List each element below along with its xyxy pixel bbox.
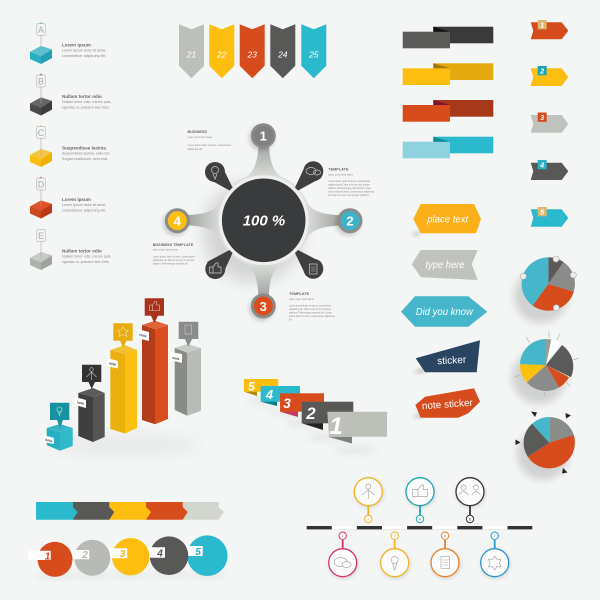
circle 5 — [176, 535, 228, 576]
bar gray: note — [172, 356, 180, 361]
cube item D: D — [38, 180, 45, 190]
text: template bottom: dapibus. Pellentesque placerat elit. Lorem — [289, 312, 332, 314]
cube item D — [30, 176, 106, 218]
circle 2: 2 — [81, 550, 88, 561]
node 3 — [249, 294, 276, 321]
node 2: 2 — [346, 214, 354, 228]
text: business: type your text here — [188, 135, 213, 139]
panel: timeline — [307, 478, 532, 578]
text: template right — [328, 168, 375, 197]
panel: 3D bar chart — [44, 298, 201, 455]
tag 1: 1 — [540, 22, 544, 30]
circle 2 — [64, 540, 110, 576]
hub connectors — [188, 145, 339, 296]
flag 23: 23 — [246, 50, 257, 60]
ribbon 1 — [327, 412, 387, 444]
circle 1: 1 — [45, 552, 51, 562]
flag 25: 25 — [308, 50, 319, 60]
pin 1 chat: 1 — [342, 533, 345, 538]
ribbon dark — [403, 27, 493, 48]
text: template right: elit. Nam at est ac orci semper. Dapibus — [328, 194, 370, 197]
ribbon 4 — [261, 386, 300, 406]
text: template bottom — [289, 292, 336, 322]
cube item B: Nullam tortor odio — [62, 94, 102, 99]
text: business template: type your text here — [153, 248, 178, 252]
text: template right: type your text here — [328, 172, 353, 176]
segment teal — [36, 502, 78, 520]
tag 2 — [531, 66, 568, 86]
flag 24 — [270, 24, 295, 78]
text: template right: TEMPLATE — [328, 168, 349, 172]
pin 4 thumb — [406, 478, 435, 523]
pin 5 document — [431, 532, 460, 578]
ribbon shadows — [246, 400, 377, 453]
flag 22 — [209, 24, 234, 78]
bar dark: note — [76, 400, 84, 406]
hub centre 100 % — [222, 178, 306, 262]
icon node: thumb — [205, 250, 232, 279]
tag 4: 4 — [539, 162, 544, 170]
bar teal — [44, 403, 73, 451]
text: business: adipiscing elit. — [188, 148, 203, 151]
circle shadows — [35, 572, 227, 578]
tag 4 — [531, 160, 568, 180]
ribbon 1: 1 — [329, 413, 343, 440]
text: business template: Lorem ipsum dolor sit amet, consectetuer — [153, 256, 195, 258]
sticker note: note sticker — [422, 398, 474, 412]
bar yellow: note — [108, 361, 116, 367]
ribbon yellow — [403, 63, 493, 85]
panel: central hub diagram — [153, 123, 375, 322]
text: template bottom: ipsum dolor sit amet, consectetuer adipiscing — [289, 315, 336, 318]
ribbon 3 — [280, 393, 324, 417]
sticker place text — [411, 204, 481, 236]
cube item B: egestas ut, posuere sed, felis. — [62, 106, 110, 110]
tag 1 — [531, 20, 568, 39]
segment orange — [146, 502, 188, 520]
tag 5: 5 — [540, 210, 544, 216]
bar teal: note — [45, 438, 53, 443]
bar orange — [137, 298, 168, 424]
panel: numbered stacked ribbons — [244, 379, 387, 453]
sticker place text: place text — [426, 214, 469, 226]
node 1: 1 — [260, 128, 267, 144]
tag 2: 2 — [539, 68, 544, 76]
panel: numbered circles — [28, 535, 228, 578]
pie chart 2 — [512, 331, 579, 404]
segment gray — [183, 502, 224, 520]
flag 25 — [301, 24, 326, 78]
bar orange: note — [139, 333, 147, 338]
node 1 — [249, 123, 276, 150]
circle 4: 4 — [156, 548, 163, 560]
ribbon 5 — [244, 379, 278, 396]
cube item C: Suspendisse lacinia — [62, 146, 106, 150]
node 2 — [336, 208, 362, 236]
cube item A: consectetuer adipiscing elit. — [62, 54, 106, 58]
cube item D: Lorem ipsum dolor sit amet, — [62, 203, 106, 207]
ribbon 3: 3 — [283, 395, 291, 411]
flag 21: 21 — [186, 50, 196, 60]
cube item E — [30, 230, 111, 270]
cube item B: Nullam tortor odio, rutrum quis, — [62, 100, 111, 104]
bar yellow — [107, 323, 137, 434]
pin 2 person: 2 — [367, 516, 370, 522]
tag 5 — [531, 207, 568, 227]
bar dark — [75, 365, 105, 442]
hub centre 100 %: 100 % — [243, 212, 285, 230]
sticker type here — [412, 250, 478, 280]
cube item A: Lorem ipsum — [62, 42, 91, 48]
panel: cube list — [30, 22, 111, 270]
text: template bottom: TEMPLATE — [289, 292, 310, 296]
text: template bottom: Lorem ipsum dolor sit amet, consectetuer — [289, 304, 331, 308]
pin 6 people — [456, 478, 485, 523]
sticker did you know: Did you know — [416, 307, 474, 318]
tag 3 — [531, 112, 568, 133]
text: business: Lorem ipsum dolor sit amet, consectetuer — [188, 144, 232, 147]
panel: numbered arrow tags — [531, 20, 568, 227]
text: business template — [153, 243, 195, 266]
sticker navy — [412, 340, 480, 373]
cube item C: Suspendisse lacinia, odio non — [62, 152, 110, 156]
segment dark — [73, 502, 114, 520]
cube item E: egestas ut, posuere sed, felis. — [62, 260, 110, 264]
flag 21 — [179, 24, 204, 78]
circle 3 — [102, 538, 149, 575]
icon node: document — [295, 250, 323, 279]
sticker did you know — [401, 296, 487, 327]
pin 3 bulb: 3 — [394, 533, 397, 538]
cube item B: B — [38, 76, 44, 86]
node 4 — [163, 208, 190, 236]
sticker type here: type here — [426, 260, 465, 271]
bar shadow — [50, 435, 200, 455]
cube item A: Lorem ipsum dolor sit amet, — [62, 48, 106, 52]
ribbon orange — [403, 100, 493, 122]
cube item D: consectetuer adipiscing elit. — [62, 208, 106, 212]
sticker navy: sticker — [437, 355, 467, 367]
circle 1 — [28, 542, 72, 577]
timeline bar — [307, 526, 532, 529]
pin 6 people: 6 — [469, 516, 472, 522]
sticker note — [412, 388, 480, 418]
text: template right: Lorem ipsum dolor sit amet, consectetuer — [328, 180, 371, 183]
text: template right: ipsum dolor sit amet, consectetuer adipiscing — [328, 190, 375, 194]
text: business: BUSINESS — [188, 130, 207, 134]
panel: folded ribbons — [403, 27, 493, 158]
cube item A: A — [38, 25, 44, 35]
ribbon 4: 4 — [265, 387, 274, 402]
text: business template: BUSINESS TEMPLATE — [153, 243, 194, 247]
pin 2 person — [354, 478, 384, 523]
flag 22: 22 — [216, 50, 227, 60]
panel: sticker labels — [401, 204, 487, 418]
cube item E: Nullam tortor odio — [62, 248, 102, 254]
cube item D: Lorem ipsum — [62, 197, 91, 202]
icon node: chat — [295, 161, 323, 190]
cube item C: feugiat vestibulum, sem erat. — [62, 157, 108, 161]
segment yellow — [109, 502, 151, 520]
circle 3: 3 — [120, 549, 126, 560]
tag 3: 3 — [540, 115, 544, 122]
text: business template: adipiscing elit. Nam at est ac orci semper — [153, 259, 195, 262]
ribbon 2 — [302, 402, 353, 430]
text: template bottom: type your text here — [289, 297, 314, 301]
pin 3 bulb — [381, 532, 410, 578]
hub shadow — [203, 182, 303, 282]
cube item E: Nullam tortor odio, rutrum quis, — [62, 254, 111, 258]
pin 5 document: 5 — [444, 533, 447, 538]
pie chart 1 — [514, 256, 576, 323]
ribbon 2: 2 — [305, 404, 316, 423]
text: template bottom: adipiscing elit. Nam at est ac orci semper — [289, 308, 331, 311]
cube item A — [30, 22, 106, 64]
pin 1 chat — [329, 532, 358, 578]
circle 5: 5 — [195, 547, 201, 558]
pin 7 star: 7 — [494, 533, 497, 538]
node 4: 4 — [174, 214, 182, 228]
cube item C: C — [38, 128, 45, 138]
cube item E: E — [38, 231, 44, 241]
cube item C — [30, 125, 110, 167]
pin 4 thumb: 4 — [419, 516, 422, 522]
flag 23 — [240, 24, 265, 78]
pie chart 3 — [516, 412, 575, 480]
text: business — [188, 130, 232, 151]
ribbon 5: 5 — [248, 380, 255, 394]
panel: chevron process bar — [36, 502, 224, 520]
bar gray — [170, 322, 201, 416]
flag 24: 24 — [277, 50, 288, 60]
text: business template: dapibus. Pellentesque placerat elit. — [153, 262, 189, 266]
text: template bottom: elit. — [289, 318, 293, 322]
cube item B — [30, 74, 111, 116]
circle 4 — [139, 536, 188, 575]
node 3: 3 — [260, 299, 267, 314]
icon node: bulb — [205, 162, 232, 190]
text: template right: adipiscing elit. Nam at est ac orci semper — [328, 184, 370, 186]
pin 7 star — [481, 532, 510, 578]
ribbon blue — [403, 137, 493, 158]
panel: numbered chevron flags — [179, 24, 326, 78]
text: template right: dapibus. Pellentesque placerat elit. Lorem — [328, 187, 371, 190]
